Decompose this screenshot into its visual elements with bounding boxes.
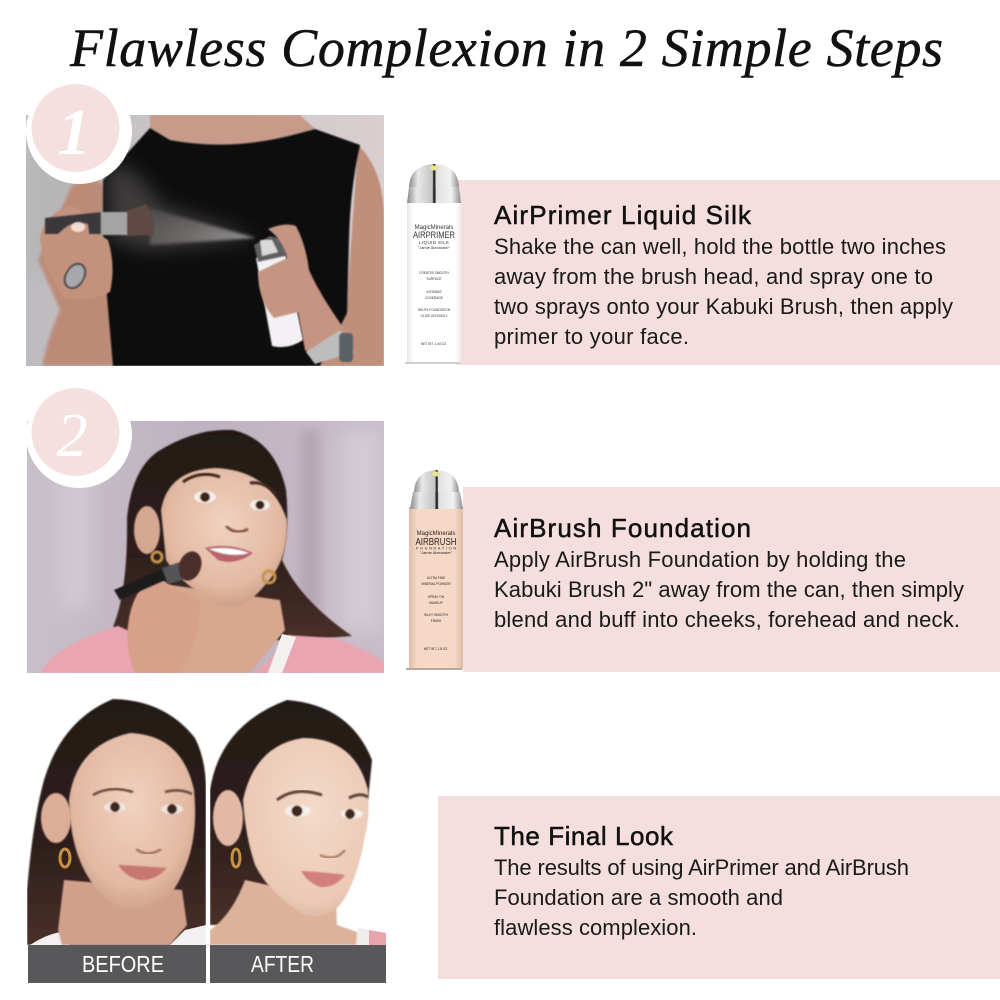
photo 1: black dress	[103, 128, 360, 366]
product: AirBrush Foundation can: MINERAL POWDER	[421, 582, 451, 586]
product: AirPrimer can	[405, 164, 461, 364]
text block: final look description: flawless complexion.	[494, 915, 697, 940]
product: AirBrush Foundation can: MagicMinerals	[417, 531, 455, 537]
after: ear	[213, 790, 243, 846]
after: lips	[301, 871, 345, 887]
text block: final look description	[494, 855, 909, 940]
label bar: after	[210, 945, 386, 983]
product: AirBrush Foundation can: FINISH	[431, 619, 442, 623]
text block: step 1 instructions: two sprays onto your Kabuki Brush, then apply	[494, 294, 953, 319]
product: AirBrush Foundation can: NET WT. 1.8 OZ.	[424, 647, 448, 651]
text block: step 2 instructions	[494, 547, 964, 632]
step 2 badge: 2	[56, 402, 88, 470]
after: eyes and brows	[277, 791, 368, 819]
photo: step 1 spraying primer onto brush	[26, 115, 384, 366]
product: AirPrimer can: INVISIBLE	[426, 290, 442, 294]
text block: step 1 instructions: away from the brush head, and spray one to	[494, 264, 933, 289]
step 1 badge: 1	[58, 96, 90, 169]
photo 2: face	[161, 468, 287, 607]
text block: step 1 instructions: primer to your face.	[494, 324, 689, 349]
product: AirBrush Foundation can: MAKEUP	[429, 601, 443, 605]
product: AirPrimer can: COVERAGE	[425, 296, 443, 300]
heading: AirBrush Foundation: AirBrush Foundation	[494, 513, 751, 543]
after: neck	[210, 880, 357, 945]
label bar: before: BEFORE	[82, 951, 164, 977]
product: AirPrimer can: HELPS FOUNDATION	[418, 308, 451, 312]
text block: step 2 instructions: Kabuki Brush 2" away from the can, then simply	[494, 577, 964, 602]
photo 2: hair	[113, 430, 352, 640]
product: AirPrimer can: GLIDE ON EASILY	[420, 314, 448, 318]
photo 1: right hand	[258, 225, 345, 362]
after: shirt	[356, 928, 369, 945]
product: AirBrush Foundation can: ULTRA FINE	[427, 576, 445, 580]
before: face	[69, 733, 195, 913]
panel: AirBrush Foundation	[463, 487, 1000, 672]
product: AirPrimer can: MagicMinerals	[415, 225, 453, 231]
panel: AirPrimer Liquid Silk	[456, 180, 1000, 365]
before: eyes and brows	[93, 789, 192, 814]
product: AirPrimer can: SURFACE	[426, 277, 442, 281]
step 1 badge	[26, 78, 132, 184]
photo 1: left hand	[40, 206, 113, 299]
product: AirPrimer can: "Jamie Alexander"	[418, 245, 451, 250]
product: AirBrush Foundation can: "Jamie Alexander"	[420, 550, 453, 555]
before: ear	[41, 793, 71, 843]
photo: after	[210, 698, 386, 945]
photo 2: ear	[134, 506, 160, 554]
text block: final look description: The results of using AirPrimer and AirBrush	[494, 855, 909, 880]
photo 2: pink shirt	[40, 626, 384, 673]
photo 1: fingers on brush	[57, 221, 90, 235]
heading: AirPrimer Liquid Silk: AirPrimer Liquid Silk	[494, 200, 752, 230]
before: neck	[58, 880, 187, 945]
product: AirPrimer can: CREATES SMOOTH	[419, 271, 450, 275]
photo 2: eyes and brows	[183, 474, 276, 510]
before: hair	[27, 699, 206, 945]
label bar: before	[28, 945, 206, 983]
step 2 badge	[26, 382, 132, 488]
photo 2: nose	[226, 526, 248, 532]
after: earring	[232, 849, 240, 867]
photo 2: smile	[205, 546, 253, 562]
photo: step 2 applying foundation	[27, 421, 384, 673]
photo 1: spray cloud	[105, 164, 258, 250]
before: earring	[60, 849, 70, 867]
photo 2: earrings	[152, 552, 275, 583]
after: nose	[320, 850, 345, 858]
after: face	[243, 738, 369, 916]
photo 1: neck and chest	[150, 115, 315, 146]
product: AirPrimer can: NET WT. 1.54 OZ.	[421, 342, 447, 346]
photo 2: brush	[114, 548, 205, 600]
text block: step 1 instructions	[494, 234, 953, 349]
photo 1: spray mist	[150, 208, 256, 245]
product: AirPrimer can: AIRPRIMER	[413, 230, 455, 241]
title: Flawless Complexion in 2 Simple Steps	[69, 18, 943, 78]
photo 1: spray can	[254, 236, 303, 347]
panel: The Final Look	[438, 796, 1000, 979]
photo 2: hand	[126, 580, 180, 673]
after: hair	[210, 700, 372, 925]
text block: final look description: Foundation are a smooth and	[494, 885, 783, 910]
product: AirPrimer can: LIQUID SILK	[419, 240, 449, 245]
product: AirBrush Foundation can	[406, 470, 463, 670]
text block: step 1 instructions: Shake the can well, hold the bottle two inches	[494, 234, 946, 259]
after: shirt pink	[369, 930, 386, 945]
photo 1: kabuki brush	[45, 204, 154, 236]
text block: step 2 instructions: blend and buff into cheeks, forehead and neck.	[494, 607, 960, 632]
photo 1: right arm	[320, 145, 384, 366]
before: white top	[30, 925, 206, 945]
product: AirBrush Foundation can: SILKY SMOOTH	[424, 613, 449, 617]
photo: before	[27, 698, 206, 945]
photo 2: neck	[170, 584, 286, 673]
photo 1: ring	[62, 262, 88, 290]
before: lips	[118, 865, 167, 880]
product: AirBrush Foundation can: SPRAY ON	[428, 595, 445, 599]
product: AirBrush Foundation can: FOUNDATION	[416, 546, 456, 550]
label bar: after: AFTER	[251, 951, 314, 977]
photo 1: watch	[306, 330, 354, 364]
product: AirBrush Foundation can: AIRBRUSH	[416, 537, 456, 548]
text block: step 2 instructions: Apply AirBrush Foundation by holding the	[494, 547, 906, 572]
before: nose	[136, 849, 161, 854]
photo 1: left arm	[38, 180, 118, 366]
photo 2: white undershirt	[268, 634, 296, 673]
heading: The Final Look: The Final Look	[494, 821, 674, 851]
